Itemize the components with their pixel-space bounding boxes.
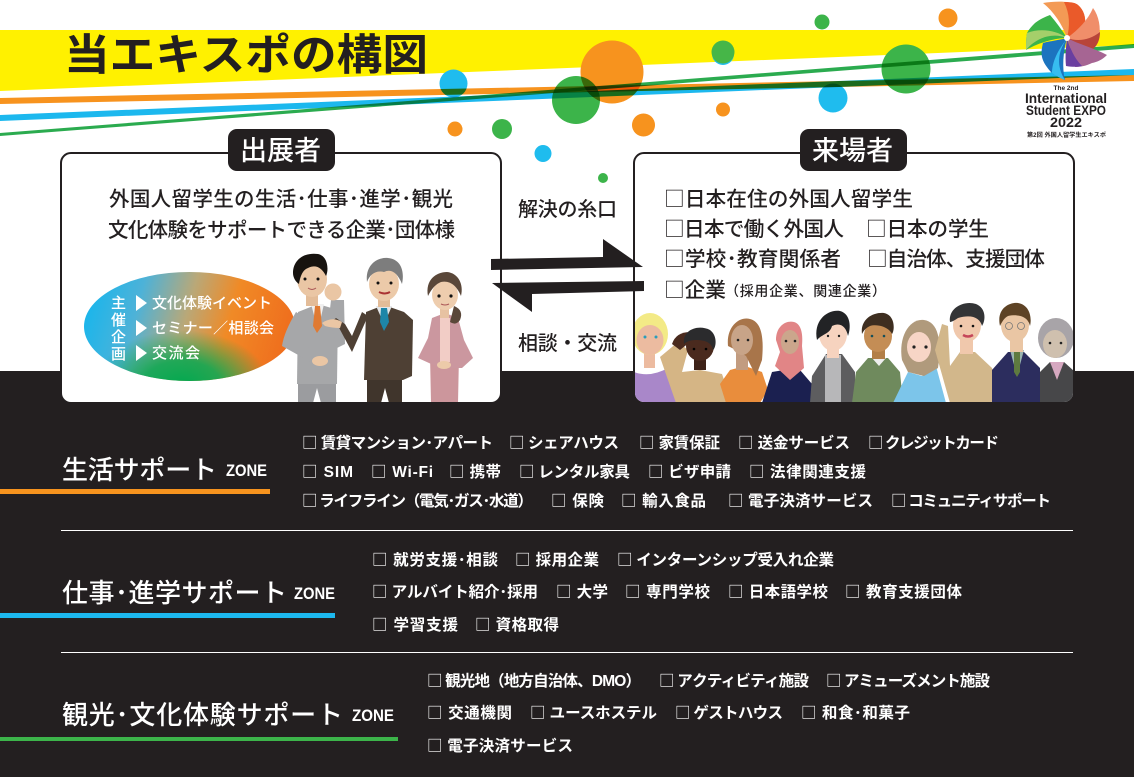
- logo: International Student EXPO 2022: Student EXPO: [1026, 102, 1106, 118]
- zone heading: 観光･文化体験サポート: [62, 700, 343, 730]
- zone items: □ ゲストハウス: [675, 701, 783, 723]
- zone items: □ 法律関連支援: [749, 460, 866, 482]
- zone items: □ 輸入食品: [621, 489, 706, 511]
- person: woman in hijab: [762, 322, 812, 403]
- visitor checklist: □自治体、支援団体: [867, 242, 1045, 272]
- visitor checklist: □日本在住の外国人留学生: [664, 182, 913, 212]
- zone heading: [0, 578, 335, 618]
- zone heading: ZONE: [294, 584, 335, 603]
- zone items: □ アルバイト紹介･採用: [372, 580, 538, 602]
- zone items: □ インターンシップ受入れ企業: [617, 548, 834, 570]
- yellow title band: [0, 30, 1134, 91]
- arrow: left: [492, 281, 644, 312]
- zone items: □ 日本語学校: [728, 580, 828, 602]
- zone items: □ レンタル家具: [519, 460, 630, 482]
- zone items: □ 就労支援･相談: [372, 548, 498, 570]
- zone items: [427, 669, 990, 756]
- illustration: three business people: [282, 254, 473, 403]
- gradient oval: organiser events: 企: [111, 329, 126, 346]
- label: consultation and exchange: 相談・交流: [518, 332, 617, 355]
- zone items: □ アミューズメント施設: [826, 669, 990, 691]
- person: grey-haired woman in dark suit: [1038, 318, 1075, 403]
- zone items: □ ビザ申請: [648, 460, 731, 482]
- exhibitors description: [108, 188, 456, 242]
- zone items: □ 教育支援団体: [845, 580, 962, 602]
- logo: International Student EXPO 2022: 2022: [1050, 114, 1082, 130]
- zone items: □ 賃貸マンション･アパート: [302, 431, 493, 453]
- zone items: □ 電子決済サービス: [427, 734, 573, 756]
- zone items: □ SIM: [302, 460, 353, 482]
- gradient oval: organiser events: 交流会: [152, 345, 200, 362]
- person: man with glasses in navy suit: [992, 303, 1040, 403]
- zone items: □ 学習支援: [372, 613, 458, 635]
- person: long-haired woman in blue top: [893, 320, 946, 403]
- visitor checklist: □日本の学生: [866, 212, 989, 242]
- person: blonde woman in purple: [635, 313, 676, 402]
- zone items: □ 採用企業: [515, 548, 599, 570]
- zone items: [302, 431, 1051, 511]
- heading: exhibitors: 出展者: [240, 136, 321, 166]
- green stripe: [0, 44, 1134, 136]
- title: 当エキスポの構図: [64, 32, 428, 80]
- divider: [61, 652, 1073, 653]
- visitor checklist: □学校･教育関係者: [664, 242, 841, 272]
- zone items: □ 専門学校: [625, 580, 710, 602]
- zone heading: ZONE: [352, 706, 394, 725]
- zone: daily life support: [0, 431, 1051, 511]
- zone heading: [0, 455, 270, 494]
- zone items: □ ライフライン（電気･ガス･水道）: [302, 489, 533, 511]
- zone items: □ 携帯: [449, 460, 501, 482]
- exhibitors description: 文化体験をサポートできる企業･団体様: [108, 219, 456, 242]
- person: man in grey jacket: [810, 311, 856, 403]
- arrow: right: [491, 239, 643, 270]
- person: woman in pink suit: [418, 272, 473, 403]
- zone heading: ZONE: [226, 461, 267, 480]
- zone: work and study support: [0, 548, 962, 635]
- logo: International Student EXPO 2022: [1025, 2, 1107, 139]
- logo: International Student EXPO 2022: The 2nd: [1054, 85, 1078, 92]
- gradient oval: organiser events: [84, 272, 294, 381]
- illustration: diverse visitors: [632, 303, 1075, 405]
- zone heading: 仕事･進学サポート: [62, 578, 287, 608]
- heading: visitors: [800, 129, 907, 171]
- gradient oval: organiser events: 主: [111, 295, 126, 312]
- panel: exhibitors: [60, 129, 502, 402]
- zone heading: [0, 700, 398, 741]
- zone heading: 生活サポート: [62, 455, 217, 485]
- zone items: □ 家賃保証: [639, 431, 720, 453]
- zone items: □ シェアハウス: [509, 431, 619, 453]
- zone items: □ ユースホステル: [530, 701, 657, 723]
- person: man in beige shirt: [660, 328, 732, 403]
- gradient oval: organiser events: セミナー／相談会: [152, 320, 274, 337]
- blue stripe: [0, 69, 1134, 121]
- visitor checklist: □企業: [664, 273, 726, 303]
- dark lower background: [0, 371, 1134, 777]
- decorative colour dots: [440, 8, 958, 183]
- visitor checklist: [664, 182, 1045, 303]
- label: solution: 解決の糸口: [518, 198, 617, 221]
- gradient oval: organiser events: 画: [111, 346, 126, 363]
- gradient oval: organiser events: 文化体験イベント: [152, 295, 272, 312]
- zone items: □ 大学: [556, 580, 608, 602]
- heading: exhibitors: [228, 129, 335, 171]
- visitor checklist: □日本で働く外国人: [664, 212, 844, 242]
- zone items: □ アクティビティ施設: [659, 669, 809, 691]
- person: man with raised arm in tan sweater: [935, 303, 992, 402]
- panel: visitors: [632, 129, 1075, 405]
- orange stripe: [0, 75, 1134, 104]
- zone items: [372, 548, 962, 635]
- person: long-haired woman in orange: [720, 318, 768, 403]
- zone items: □ 資格取得: [475, 613, 559, 635]
- person: man in green sweater: [852, 313, 903, 403]
- zone items: □ 交通機関: [427, 701, 512, 723]
- person: man in brown suit: [322, 258, 413, 403]
- zone items: □ クレジットカード: [868, 431, 999, 453]
- zone items: □ 電子決済サービス: [728, 489, 873, 511]
- visitor checklist: （採用企業、関連企業）: [725, 283, 886, 299]
- person: man in grey suit: [282, 254, 345, 403]
- icon: pinwheel: [1026, 2, 1107, 80]
- heading: visitors: 来場者: [812, 136, 893, 166]
- zone items: □ 送金サービス: [738, 431, 850, 453]
- logo: International Student EXPO 2022: 第2回 外国人留学生エキスポ: [1027, 131, 1106, 139]
- gradient oval: organiser events: 催: [111, 312, 126, 329]
- exhibitors description: 外国人留学生の生活･仕事･進学･観光: [109, 188, 453, 211]
- zone: tourism and culture support: [0, 669, 990, 756]
- zone items: □ 保険: [551, 489, 604, 511]
- divider: [61, 530, 1073, 531]
- zone items: □ コミュニティサポート: [891, 489, 1051, 511]
- logo: International Student EXPO 2022: International: [1025, 90, 1107, 106]
- zone items: □ Wi-Fi: [371, 460, 433, 482]
- zone items: □ 和食･和菓子: [801, 701, 910, 723]
- zone items: □ 観光地（地方自治体、DMO）: [427, 669, 641, 691]
